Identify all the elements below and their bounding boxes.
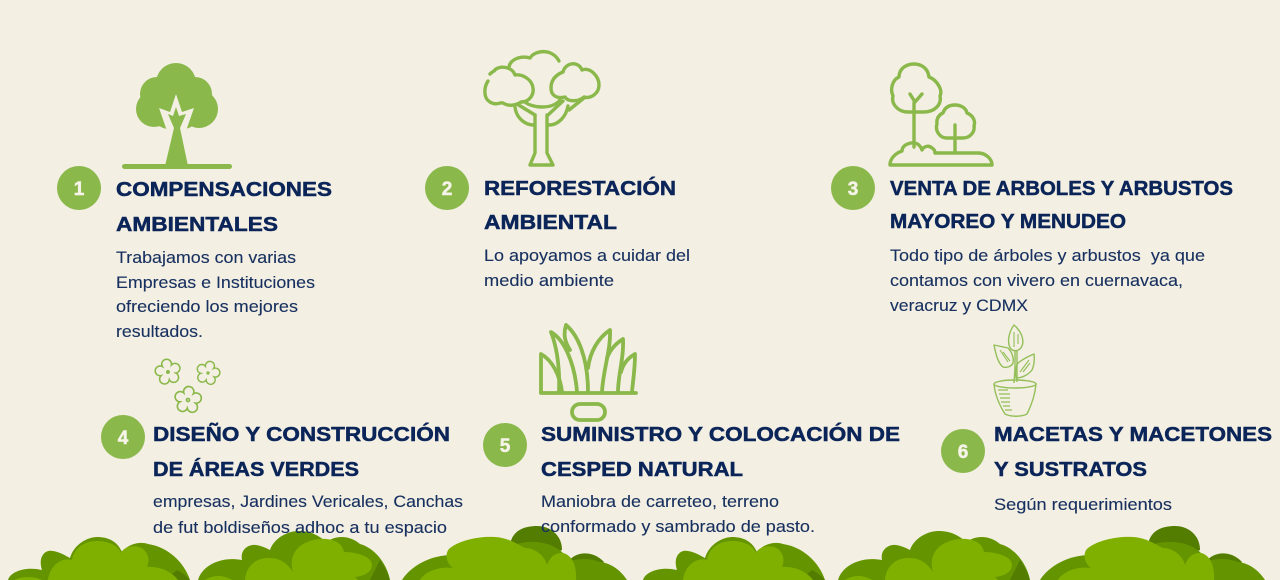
heading: VENTA DE ARBOLES Y ARBUSTOS: [890, 178, 1233, 200]
description: ofreciendo los mejores: [116, 297, 298, 316]
icon: trees on mound: [890, 64, 992, 165]
description: Lo apoyamos a cuidar del: [484, 246, 690, 265]
description: [541, 492, 815, 536]
icon: outlined tree: [485, 52, 599, 165]
description: [484, 246, 690, 290]
heading: SUMINISTRO Y COLOCACIÓN DE: [541, 422, 900, 446]
description: Maniobra de carreteo, terreno: [541, 492, 779, 511]
heading: DISEÑO Y CONSTRUCCIÓN: [153, 422, 450, 446]
heading: Y SUSTRATOS: [994, 459, 1147, 481]
heading: [541, 422, 900, 481]
description: Todo tipo de árboles y arbustos ya que: [890, 246, 1205, 265]
icon: potted plant: [994, 325, 1036, 416]
number badge 6: [941, 429, 985, 473]
number badge 5: 5: [500, 436, 511, 457]
heading: AMBIENTAL: [484, 212, 617, 234]
heading: [153, 422, 450, 481]
number badge 3: [831, 166, 875, 210]
bush 1: [8, 537, 190, 580]
icon: three flowers: [154, 357, 222, 413]
description: de fut boldiseños adhoc a tu espacio: [153, 518, 447, 537]
icon: grass: [541, 325, 636, 420]
bush 3: [402, 526, 627, 580]
number badge 4: [101, 415, 145, 459]
description: Según requerimientos: [994, 495, 1172, 514]
description: medio ambiente: [484, 271, 614, 290]
heading: [116, 179, 332, 236]
number badge 2: [425, 166, 469, 210]
panel: compensaciones ambientales: [57, 63, 332, 341]
bush 5: [838, 531, 1030, 580]
panel: macetas y sustratos: [941, 325, 1272, 514]
panel: venta de arboles: [831, 64, 1233, 315]
number badge 2: 2: [442, 179, 452, 200]
bush 2: [198, 531, 390, 580]
panel: diseno y construccion: [101, 357, 463, 537]
description: Trabajamos con varias: [116, 248, 296, 267]
number badge 4: 4: [118, 428, 129, 449]
bush 4: [643, 537, 825, 580]
description: empresas, Jardines Vericales, Canchas: [153, 492, 463, 511]
description: [116, 248, 315, 341]
description: contamos con vivero en cuernavaca,: [890, 271, 1183, 290]
icon: solid tree: [122, 63, 232, 169]
panel: suministro de cesped: [483, 325, 900, 536]
heading: MAYOREO Y MENUDEO: [890, 211, 1126, 233]
heading: REFORESTACIÓN: [484, 176, 676, 200]
number badge 3: 3: [848, 179, 858, 200]
heading: AMBIENTALES: [116, 214, 278, 236]
heading: COMPENSACIONES: [116, 179, 332, 201]
description: resultados.: [116, 322, 203, 341]
description: conformado y sambrado de pasto.: [541, 517, 815, 536]
heading: CESPED NATURAL: [541, 459, 743, 481]
description: [890, 246, 1205, 315]
bush row: [8, 526, 1265, 580]
heading: [994, 424, 1272, 481]
heading: [890, 178, 1233, 233]
description: Empresas e Instituciones: [116, 273, 315, 292]
heading: DE ÁREAS VERDES: [153, 458, 359, 481]
number badge 1: [57, 166, 101, 210]
description: [153, 492, 463, 537]
number badge 5: [483, 423, 527, 467]
number badge 6: 6: [958, 442, 968, 463]
number badge 1: 1: [74, 179, 85, 200]
heading: MACETAS Y MACETONES: [994, 424, 1272, 446]
bush 6: [1040, 526, 1265, 580]
heading: [484, 176, 676, 234]
description: veracruz y CDMX: [890, 296, 1028, 315]
panel: reforestacion ambiental: [425, 52, 690, 290]
